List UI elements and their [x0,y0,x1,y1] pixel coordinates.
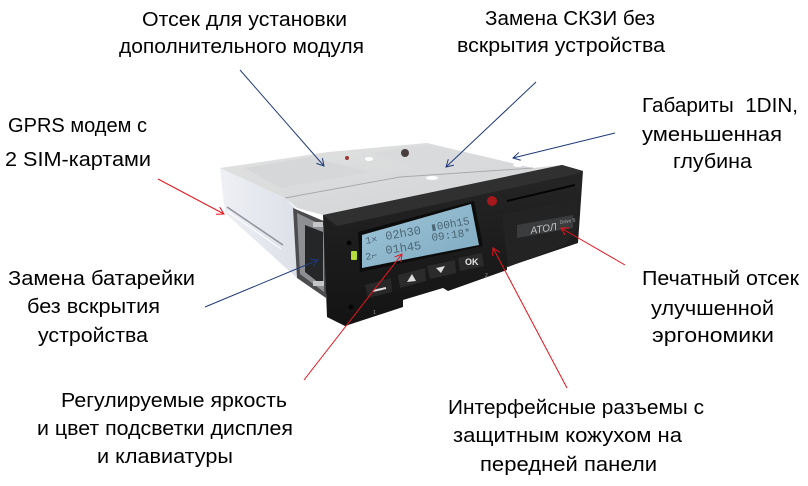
label: additional module bay [119,9,364,58]
label: interface connectors [448,397,704,476]
arrow: interface connectors [493,248,567,388]
label: battery replacement [8,268,195,347]
label: SKZI replacement: вскрытия устройства [457,35,666,57]
keypad: 2 [485,273,488,279]
label: dimensions: Габариты 1DIN, [642,95,798,117]
arrow: SKZI replacement [446,82,536,167]
label: GPRS modem: GPRS модем с [8,115,147,137]
display: 02h30 [384,224,422,244]
label: printer compartment: улучшенной [651,298,774,320]
label: battery replacement: без вскрытия [27,296,160,318]
label: display brightness: и цвет подсветки дисплея [37,418,293,440]
battery compartment [293,208,326,298]
front bezel [323,165,583,326]
label: battery replacement: Замена батарейки [8,268,195,290]
arrow: printer compartment [561,228,625,265]
label: display brightness: Регулируемые яркость [61,390,287,412]
display: 09:18* [431,228,472,245]
label: dimensions: уменьшенная [642,124,782,146]
label: printer compartment: Печатный отсек [642,268,799,290]
label: display brightness: и клавиатуры [97,446,233,468]
status lamp and screws [346,240,352,246]
label: printer compartment: эргономики [652,325,774,347]
arrow: battery replacement [205,260,318,307]
device left side panel [220,168,297,278]
label: additional module bay: дополнительного модуля [119,36,364,58]
printer compartment: ATOЛ [529,222,558,237]
device illustration [220,143,583,326]
label: SKZI replacement [457,8,666,57]
display: 01h45 [385,239,422,258]
printer compartment [502,185,578,267]
arrow: GPRS modem [158,179,224,214]
label: display brightness [37,390,293,468]
keypad [365,253,488,316]
label: interface connectors: Интерфейсные разъемы с [448,397,704,419]
device top cover [220,143,562,215]
label: printer compartment [642,268,799,347]
display: 2⌐ [365,251,379,264]
printer compartment: Drive 5 [559,218,576,226]
display [358,201,483,272]
label: dimensions [642,95,798,173]
keypad: 1 [373,310,376,316]
label: GPRS modem [5,115,151,171]
arrow: dimensions [513,133,615,158]
keypad: OK [465,257,479,267]
arrow: additional module [240,70,324,166]
label: SKZI replacement: Замена СКЗИ без [485,8,655,30]
label: additional module bay: Отсек для установки [142,9,347,31]
label: GPRS modem: 2 SIM-картами [5,149,151,171]
label: battery replacement: устройства [38,325,149,347]
display: ▮00h15 [430,216,471,235]
label: interface connectors: защитным кожухом на [453,425,683,447]
arrow: display brightness [304,254,402,380]
label: interface connectors: передней панели [480,454,657,476]
label: dimensions: глубина [673,151,753,173]
display: 1× [365,235,379,248]
